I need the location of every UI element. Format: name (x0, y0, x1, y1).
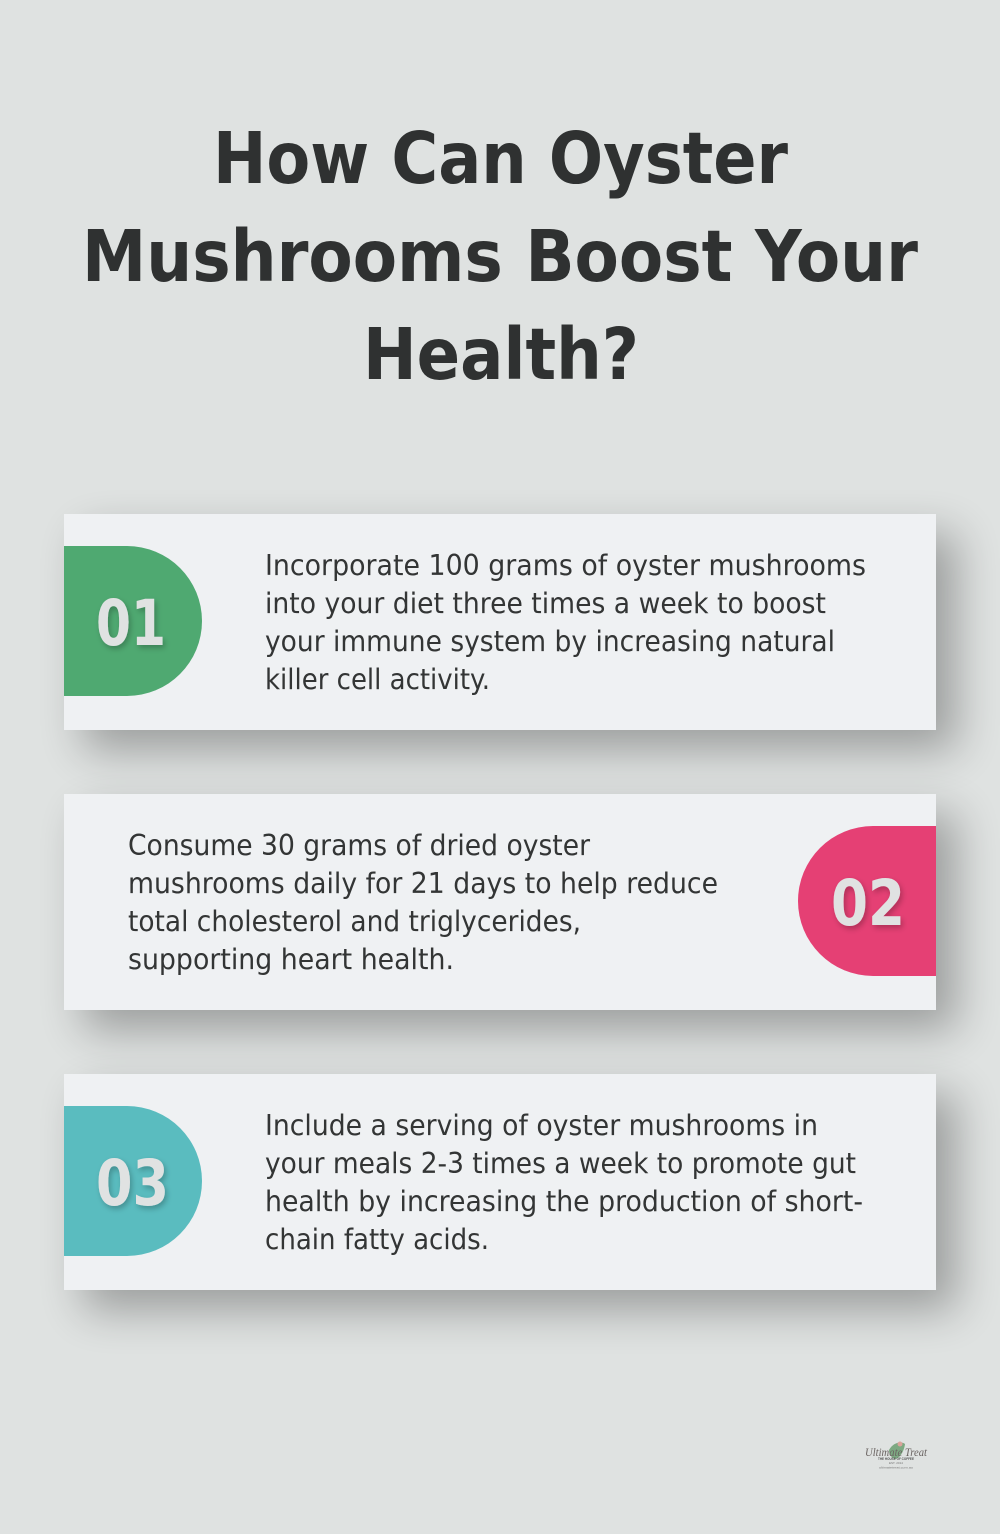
text: step 01: your immune system by increasing natural (265, 625, 835, 658)
text: step 03: chain fatty acids. (265, 1223, 489, 1256)
logo: Ultimate Treat (865, 1442, 928, 1470)
text: step 02: mushrooms daily for 21 days to help reduce (128, 867, 718, 900)
text: step 01 (265, 549, 866, 696)
badge: 03 (64, 1106, 202, 1256)
logo: Ultimate Treat: EST. 2014 (889, 1461, 904, 1465)
text: step 02 (128, 829, 718, 976)
title: How Can Oyster (213, 117, 788, 200)
text: step 01: Incorporate 100 grams of oyster mushrooms (265, 549, 866, 582)
badge: 02: 02 (831, 867, 905, 940)
text: step 03: Include a serving of oyster mushrooms in (265, 1109, 818, 1142)
badge: 03: 03 (96, 1147, 169, 1220)
text: step 03 (265, 1109, 863, 1256)
badge: 01 (64, 546, 202, 696)
logo: Ultimate Treat: Ultimate Treat (865, 1445, 928, 1459)
badge: 02 (798, 826, 936, 976)
title (82, 117, 918, 396)
text: step 03: health by increasing the production of short- (265, 1185, 863, 1218)
logo: Ultimate Treat: THE HOUSE OF COFFEE (878, 1457, 914, 1461)
logo: Ultimate Treat: ultimatetreat.com.au (879, 1466, 913, 1470)
panel: step 02 (64, 794, 956, 1030)
badge: 01: 01 (96, 587, 166, 660)
text: step 02: Consume 30 grams of dried oyster (128, 829, 590, 862)
text: step 02: total cholesterol and triglycerides, (128, 905, 581, 938)
panel: step 01 (64, 514, 956, 750)
title: Health? (363, 313, 639, 396)
text: step 03: your meals 2-3 times a week to promote gut (265, 1147, 856, 1180)
text: step 01: into your diet three times a week to boost (265, 587, 826, 620)
text: step 02: supporting heart health. (128, 943, 454, 976)
title: Mushrooms Boost Your (82, 215, 918, 298)
panel: step 03 (64, 1074, 956, 1310)
text: step 01: killer cell activity. (265, 663, 490, 696)
